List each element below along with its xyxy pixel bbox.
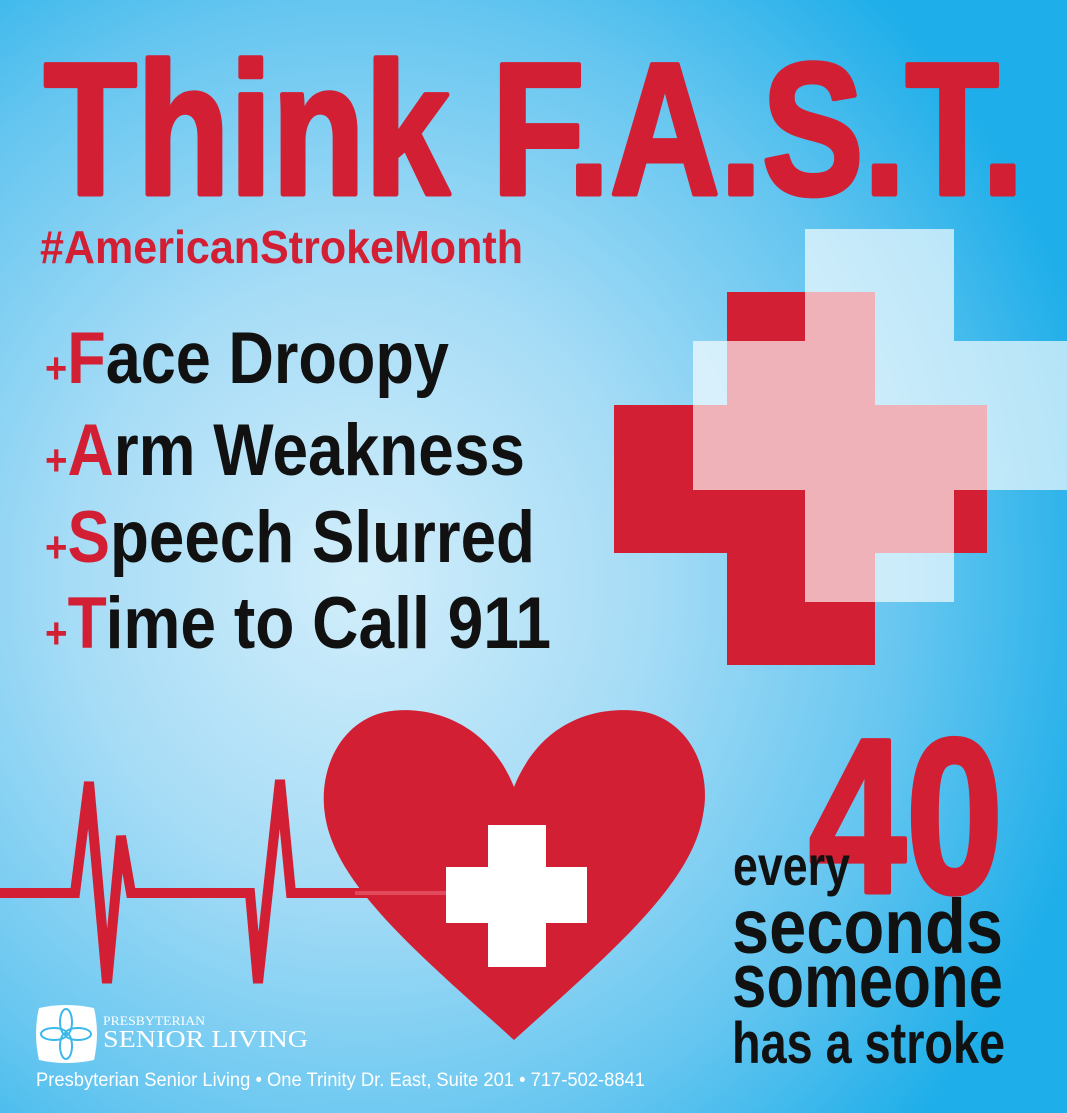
logo text xyxy=(103,1013,308,1053)
stat: 40 every seconds xyxy=(732,693,1005,1076)
item: face: +Face Droopy xyxy=(45,318,449,399)
logo text: SENIOR LIVING xyxy=(103,1027,308,1053)
stat: 40 every seconds: has a stroke xyxy=(732,1011,1005,1076)
stat: 40 every seconds: seconds xyxy=(732,884,1003,970)
stat: 40 every seconds: someone xyxy=(732,939,1003,1024)
item: arm: +Arm Weakness xyxy=(45,410,525,491)
hashtag: #AmericanStrokeMonth xyxy=(40,221,523,273)
F.A.S.T. list xyxy=(45,318,551,664)
stat: 40 every seconds: 40 xyxy=(809,693,1003,939)
icon: ECG line xyxy=(0,780,450,983)
icon: heart with cross xyxy=(324,710,705,1040)
footer address: Presbyterian Senior Living • One Trinity Dr. East, Suite 201 • 717-502-8841 xyxy=(36,1070,645,1091)
icon: flower xyxy=(36,1005,97,1063)
logo text: PRESBYTERIAN xyxy=(103,1013,206,1028)
item: time: +Time to Call 911 xyxy=(45,583,551,664)
icon: overlapping crosses xyxy=(614,229,1067,665)
item: speech: +Speech Slurred xyxy=(45,497,535,578)
stat: 40 every seconds: every xyxy=(733,834,850,897)
logo xyxy=(36,1005,308,1063)
